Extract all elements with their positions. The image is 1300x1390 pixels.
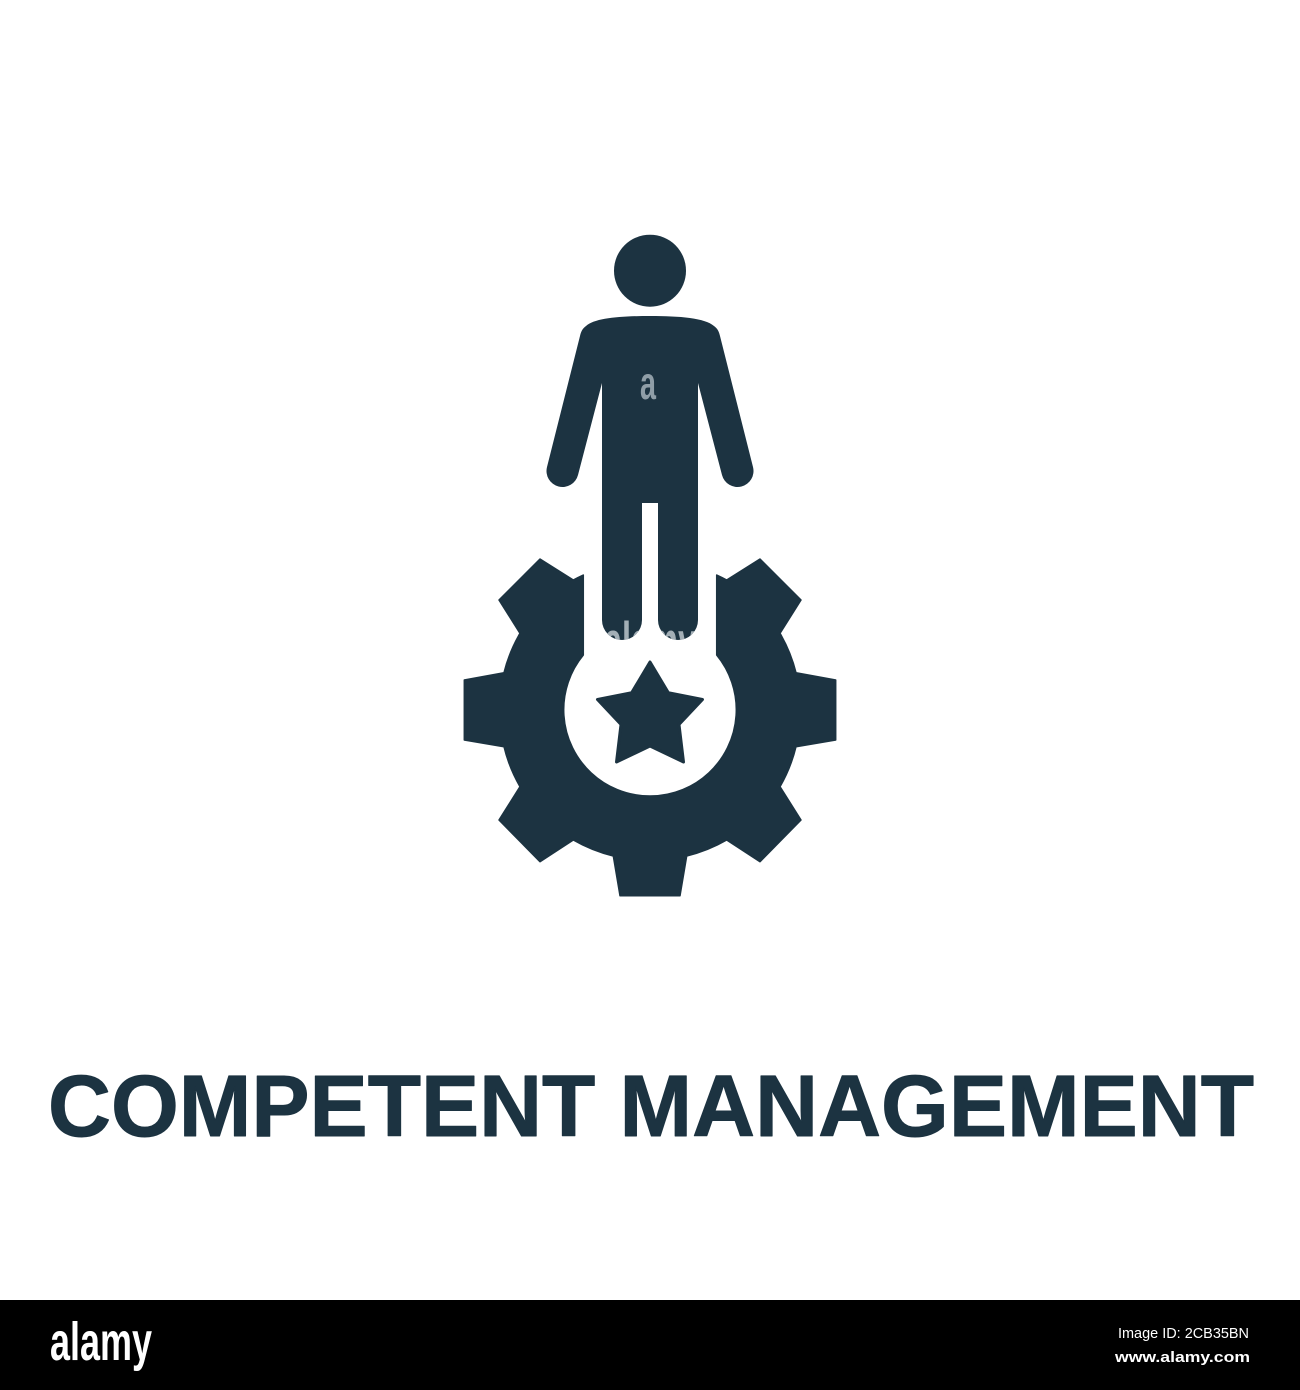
watermark letter on torso: a	[640, 357, 656, 409]
footer logo: alamy	[50, 1312, 152, 1372]
icon: person	[546, 235, 754, 640]
icon: star	[598, 662, 702, 762]
icon: gear	[464, 559, 836, 896]
person head	[614, 235, 686, 307]
footer bar	[0, 1300, 1300, 1390]
title: COMPETENT MANAGEMENT	[48, 1058, 1254, 1155]
image id: Image ID: 2CB35BN	[1118, 1325, 1249, 1342]
icon: person standing on gear with star	[464, 235, 836, 896]
website: www.alamy.com	[1114, 1349, 1250, 1366]
watermark text clipped to legs: alamy	[604, 610, 696, 672]
person body	[546, 316, 754, 640]
